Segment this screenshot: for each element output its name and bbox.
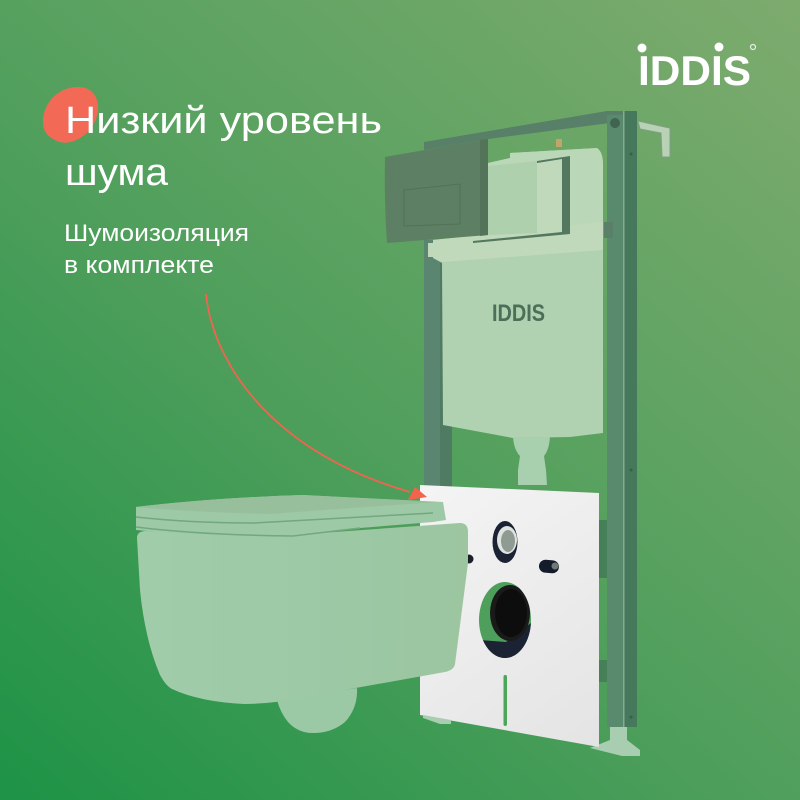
cistern logo: IDDIS bbox=[492, 300, 545, 327]
toilet seat bbox=[136, 495, 446, 536]
subtitle text: в комплекте bbox=[64, 252, 214, 279]
toilet drain bbox=[277, 688, 357, 733]
title bbox=[65, 100, 382, 194]
icon: drain pipe bbox=[513, 437, 550, 485]
green slit bbox=[504, 675, 507, 726]
toilet bowl bbox=[137, 523, 468, 704]
installation frame bbox=[424, 111, 670, 756]
title: шума bbox=[65, 152, 169, 194]
icon: red accent blob bbox=[43, 87, 98, 143]
toilet bbox=[136, 495, 468, 733]
arrow bbox=[206, 294, 427, 500]
side slot bbox=[538, 559, 559, 574]
cistern bbox=[428, 139, 613, 438]
flush plate bbox=[385, 139, 488, 243]
subtitle text bbox=[64, 220, 249, 279]
soundproofing panel bbox=[420, 485, 599, 747]
logo: iddis: IDDIS bbox=[638, 47, 751, 94]
upper hole bbox=[492, 521, 518, 563]
toilet lid surface bbox=[136, 495, 438, 514]
large hole bbox=[479, 582, 535, 660]
subtitle text: Шумоизоляция bbox=[64, 220, 249, 247]
title: Низкий уровень bbox=[65, 100, 382, 142]
seat shadow lines bbox=[136, 513, 433, 536]
